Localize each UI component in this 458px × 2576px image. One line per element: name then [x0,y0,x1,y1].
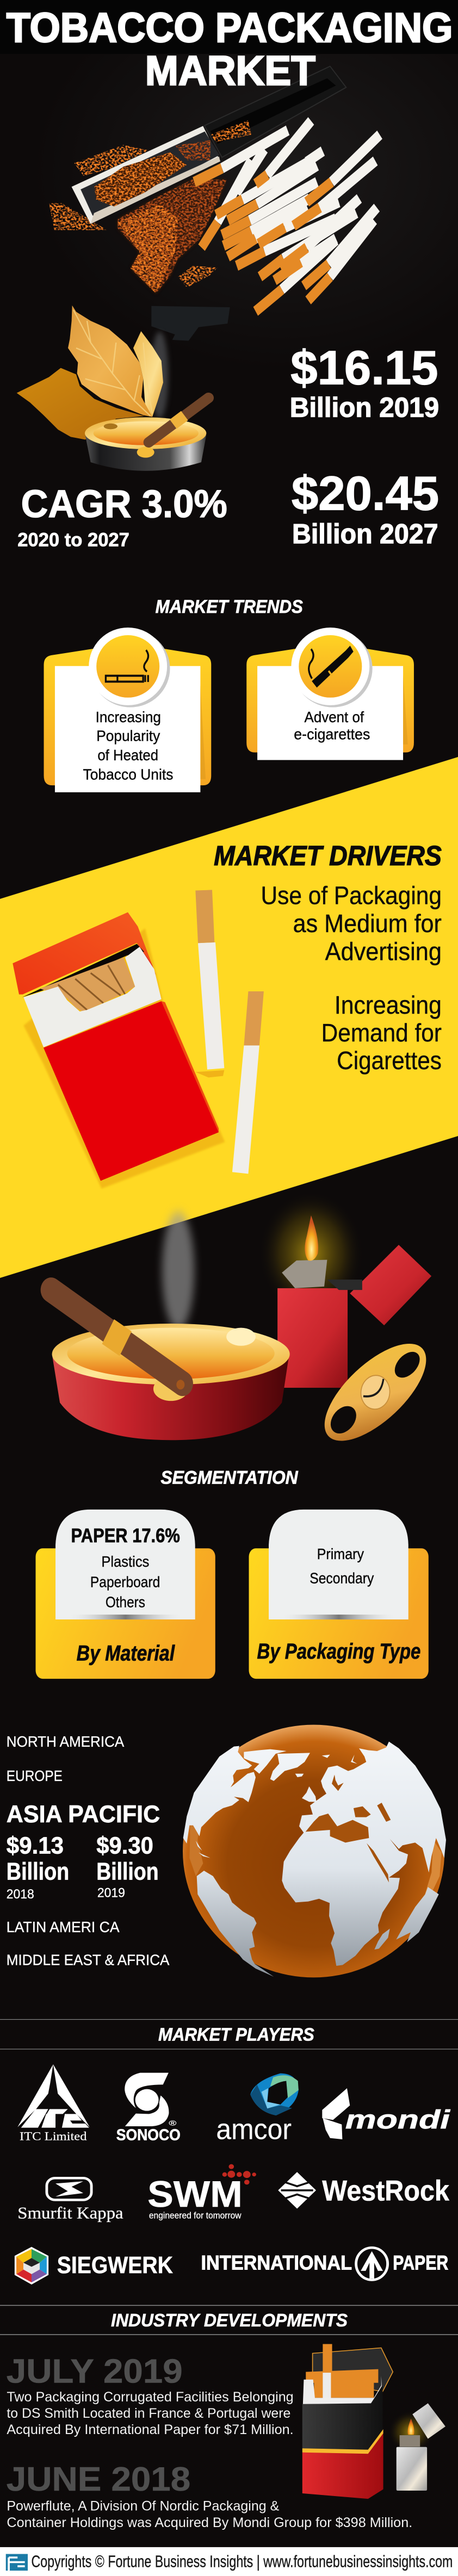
card: by packaging type: By Packaging Type [257,1639,420,1663]
logo: Sonoco: ® [169,2119,177,2127]
stat: CAGR [17,482,227,550]
hero photo section [0,0,458,418]
card: by material: Others [106,1594,145,1611]
seas [306,1774,391,1883]
text: drivers list: Increasing [335,991,442,1019]
card: heated tobacco [44,628,211,792]
red ashtray [51,1290,290,1440]
card: e-cigarettes [246,628,414,760]
development: July 2019: Acquired By International Paper for $71 Million. [7,2422,294,2437]
logo: WestRock [278,2172,449,2208]
text: regions: LATIN AMERI CA [7,1919,120,1935]
South America [197,1871,274,1977]
text: regions [7,1733,170,1969]
stat: 2019 value: Billion 2019 [290,392,439,423]
cigarette pack and loose cigarette [13,890,225,1189]
icon: cigarette [106,650,148,682]
logo: Siegwerk: SIEGWERK [57,2252,173,2279]
text: regions: Billion [7,1858,69,1885]
smoke [162,1212,194,1330]
logo: ITC [17,2064,90,2143]
text: drivers list [261,882,442,1075]
card: e-cigarettes: e-cigarettes [294,727,370,743]
title [7,4,453,94]
development: July 2019: Two Packaging Corrugated Facilities Belonging [7,2389,294,2405]
text: drivers list: as Medium for [293,910,442,938]
loose cigarette: right [232,991,264,1174]
text: regions: MIDDLE EAST & AFRICA [7,1952,170,1969]
card: heated tobacco: Tobacco Units [83,767,173,783]
title: TOBACCO PACKAGING [7,4,453,51]
North America [183,1746,256,1843]
development: June 2018: JUNE 2018 [7,2460,190,2498]
logo: SWM: SWM [147,2173,243,2214]
text: regions: 2018 [7,1886,34,1901]
logo: Sonoco: SONOCO [116,2127,181,2144]
card: heated tobacco: of Heated [97,747,158,764]
cigar cutter [312,1326,439,1458]
lighter [258,1191,431,1388]
card: heated tobacco: Increasing [96,709,161,726]
footer [0,2547,458,2576]
stat: 2027 value: Billion 2027 [292,518,438,549]
text: regions: $9.30 [96,1833,153,1859]
Australia side [396,1887,439,1942]
Greenland [270,1753,310,1781]
text: drivers list: Use of Packaging [261,882,442,909]
development: June 2018: Container Holdings was Acquired By Mondi Group for $398 Million. [7,2515,412,2530]
card: by packaging type [249,1510,429,1679]
logo: Amcor: amcor [216,2113,292,2145]
stat: CAGR: CAGR 3.0% [21,482,227,525]
development: July 2019: to DS Smith Located in France & Portugal were [7,2405,290,2421]
trends and drivers section [44,596,442,1174]
logos and developments section [0,2164,458,2576]
text: regions: NORTH AMERICA [7,1733,124,1750]
market player logos, row one [17,2064,451,2145]
logo: Smurfit Kappa: Smurfit Kappa [17,2203,123,2222]
logo: Smurfit Kappa [17,2178,123,2222]
card: by material: By Material [77,1641,175,1665]
development: July 2019 [7,2352,294,2437]
card: e-cigarettes: Advent of [305,709,364,726]
icon: Fortune Business Insights logo [6,2554,28,2571]
illustration: leaves and ashtray [17,306,230,471]
stat: 2019 value: $16.15 [290,340,438,394]
globe [183,1725,446,1977]
logo: Amcor [216,2074,299,2145]
yellow diagonal band [0,757,458,1278]
logo: Sonoco [116,2073,181,2144]
card: by material: Paperboard [90,1574,160,1591]
heading: market players: MARKET PLAYERS [158,2025,314,2045]
heading: segmentation: SEGMENTATION [160,1467,299,1488]
illustration and segmentation section [36,1191,439,1679]
logo: SWM: engineered for tomorrow [149,2210,242,2220]
development: June 2018: Powerflute, A Division Of Nordic Packaging & [7,2498,279,2513]
logo: Siegwerk [15,2247,173,2285]
logo: International Paper [201,2248,448,2280]
development: July 2019: JULY 2019 [7,2352,183,2390]
card: by packaging type: Secondary [310,1571,374,1587]
card: by packaging type: Primary [317,1546,364,1563]
text: drivers list: Advertising [325,938,442,965]
development: June 2018 [7,2460,412,2530]
text: regions: EUROPE [7,1767,63,1784]
text: regions: 2019 [97,1885,125,1900]
card: by material [36,1510,215,1679]
stats and title [7,4,453,550]
text: drivers list: Cigarettes [337,1047,442,1075]
card: by material: Plastics [101,1554,149,1571]
heading: market trends: MARKET TRENDS [156,596,303,617]
logo: International Paper: INTERNATIONAL [201,2252,352,2274]
stat: 2027 value [292,466,439,549]
title: MARKET [145,47,315,94]
stat: 2019 value [290,340,439,423]
text: regions: $9.13 [7,1833,64,1859]
card: heated tobacco: Popularity [96,728,160,744]
Eurasia and Africa [282,1742,446,1966]
text: regions: ASIA PACIFIC [7,1801,160,1828]
photo: roller and cigarettes [49,66,380,312]
logo: Mondi [322,2088,451,2139]
illustration: pack and lighter [302,2344,445,2499]
stat: CAGR: 2020 to 2027 [17,529,129,550]
logo: ITC: ITC Limited [20,2130,86,2143]
icon: e-cigarette [309,647,352,686]
logo: SWM [147,2164,256,2220]
text: drivers list: Demand for [321,1019,442,1047]
heading: market drivers: MARKET DRIVERS [214,840,442,871]
heading: industry developments: INDUSTRY DEVELOPMENTS [111,2311,348,2331]
card: by material: PAPER 17.6% [71,1524,180,1546]
stat: 2027 value: $20.45 [292,466,439,520]
regions and heading section [0,1733,458,2050]
text: regions: Billion [96,1858,159,1885]
